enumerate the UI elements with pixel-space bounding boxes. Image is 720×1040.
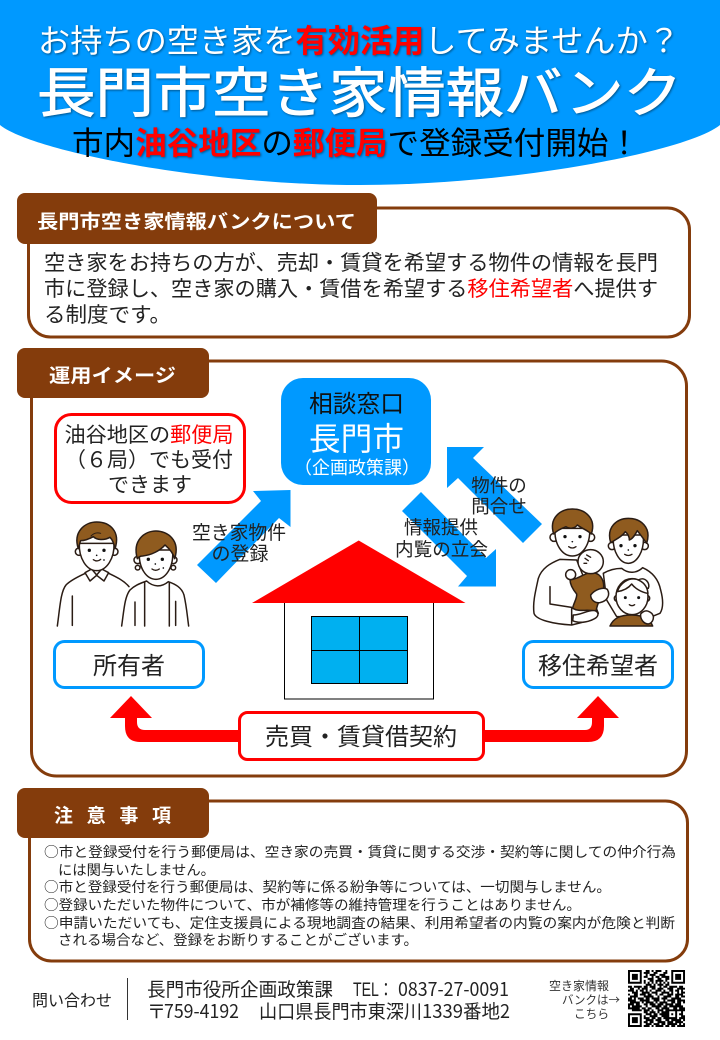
contact address: 1339: [422, 997, 463, 1024]
panel: operation image: [17, 348, 686, 776]
contact label: 問い合わせ: [32, 992, 112, 1010]
consultation desk box: [281, 378, 431, 485]
about text: る制度です。: [44, 304, 171, 327]
arrow: registration: [197, 490, 290, 583]
icon: house: [252, 540, 466, 699]
notes text: には関与いたしません。: [58, 860, 215, 880]
notes text: ○登録いただいた物件について、市が補修等の維持管理を行うことはありません。: [44, 895, 581, 915]
contract box: [240, 712, 484, 760]
notes text: ○市と登録受付を行う郵便局は、契約等に係る紛争等については、一切関与しません。: [44, 877, 611, 897]
header banner: [0, 0, 720, 185]
arrow label: inquiry: 物件の: [471, 475, 527, 496]
contact address: TEL：: [353, 980, 393, 1001]
notes text: [44, 842, 676, 950]
consultation desk box: 長門市: [309, 421, 404, 457]
notes text: される場合など、登録をお断りすることがございます。: [58, 930, 418, 950]
arrow label: information: 内覧の立会: [395, 539, 488, 560]
panel: about the bank: [17, 193, 690, 337]
illustration: family: [534, 509, 663, 626]
contact address: 番地: [463, 1001, 500, 1023]
label box: owner: 所有者: [93, 653, 165, 680]
consultation desk box: 相談窓口: [309, 391, 404, 418]
contact address: 〒: [147, 1002, 166, 1023]
arrow label: information: 情報提供: [404, 517, 478, 538]
QR caption: バンクは→: [562, 991, 620, 1008]
about text: 市に登録し、空き家の購入・賃借を希望する移住希望者へ提供す: [44, 278, 658, 301]
notes text: ○市と登録受付を行う郵便局は、空き家の売買・賃貸に関する交渉・契約等に関しての仲介行為: [44, 842, 676, 862]
arrow: information provision: [402, 492, 496, 586]
subtitle: 市内油谷地区の郵便局で登録受付開始！: [72, 125, 640, 161]
illustration: owner couple: [57, 522, 189, 626]
notes text: ○申請いただいても、定住支援員による現地調査の結果、利用希望者の内覧の案内が危険と判断: [44, 913, 675, 933]
panel heading tab: 運用イメージ: [49, 365, 176, 387]
arrow label: inquiry: 問合せ: [471, 496, 527, 517]
about text: [44, 252, 658, 327]
contract box: 売買・賃貸借契約: [265, 724, 457, 751]
callout: post offices: [56, 414, 244, 502]
label box: owner: [54, 642, 204, 688]
QR caption: こちら: [574, 1007, 609, 1021]
callout: post offices: （６局）でも受付: [65, 449, 233, 472]
callout: post offices: 油谷地区の郵便局: [64, 424, 234, 447]
label box: prospective settlers: 移住希望者: [538, 653, 658, 680]
footer: contact: [32, 975, 510, 1024]
headline: invitation: お持ちの空き家を有効活用してみませんか？: [38, 23, 680, 59]
title: 長門市空き家情報バンク: [37, 64, 682, 124]
contact address: 2: [500, 997, 510, 1024]
QR caption: [549, 979, 620, 1021]
contact address: [147, 975, 510, 1024]
label box: prospective settlers: [524, 642, 672, 688]
contact address: 長門市役所企画政策課: [147, 979, 333, 1001]
arrow: contract to both parties: [110, 696, 619, 742]
arrow label: information: [395, 517, 488, 560]
panel heading tab: [17, 788, 209, 838]
icon: QR code: [628, 971, 685, 1026]
callout: post offices: できます: [108, 474, 192, 497]
panel heading tab: [17, 193, 377, 244]
consultation desk box: （企画政策課）: [294, 458, 420, 478]
panel: notes: [17, 788, 688, 961]
panel heading tab: 注 意 事 項: [54, 805, 171, 827]
contact address: 759-4192: [164, 997, 239, 1024]
arrow: property inquiry: [447, 447, 542, 543]
arrow label: registration: [192, 522, 286, 565]
contact address: 0837-27-0091: [398, 975, 509, 1002]
QR caption: 空き家情報: [549, 979, 609, 993]
panel heading tab: [17, 348, 209, 398]
about text: 空き家をお持ちの方が、売却・賃貸を希望する物件の情報を長門: [44, 252, 658, 275]
arrow label: registration: の登録: [211, 543, 269, 565]
arrow label: inquiry: [471, 475, 527, 517]
panel heading tab: 長門市空き家情報バンクについて: [37, 211, 356, 233]
contact address: 山口県長門市東深川: [259, 1001, 422, 1023]
arrow label: registration: 空き家物件: [192, 522, 286, 544]
